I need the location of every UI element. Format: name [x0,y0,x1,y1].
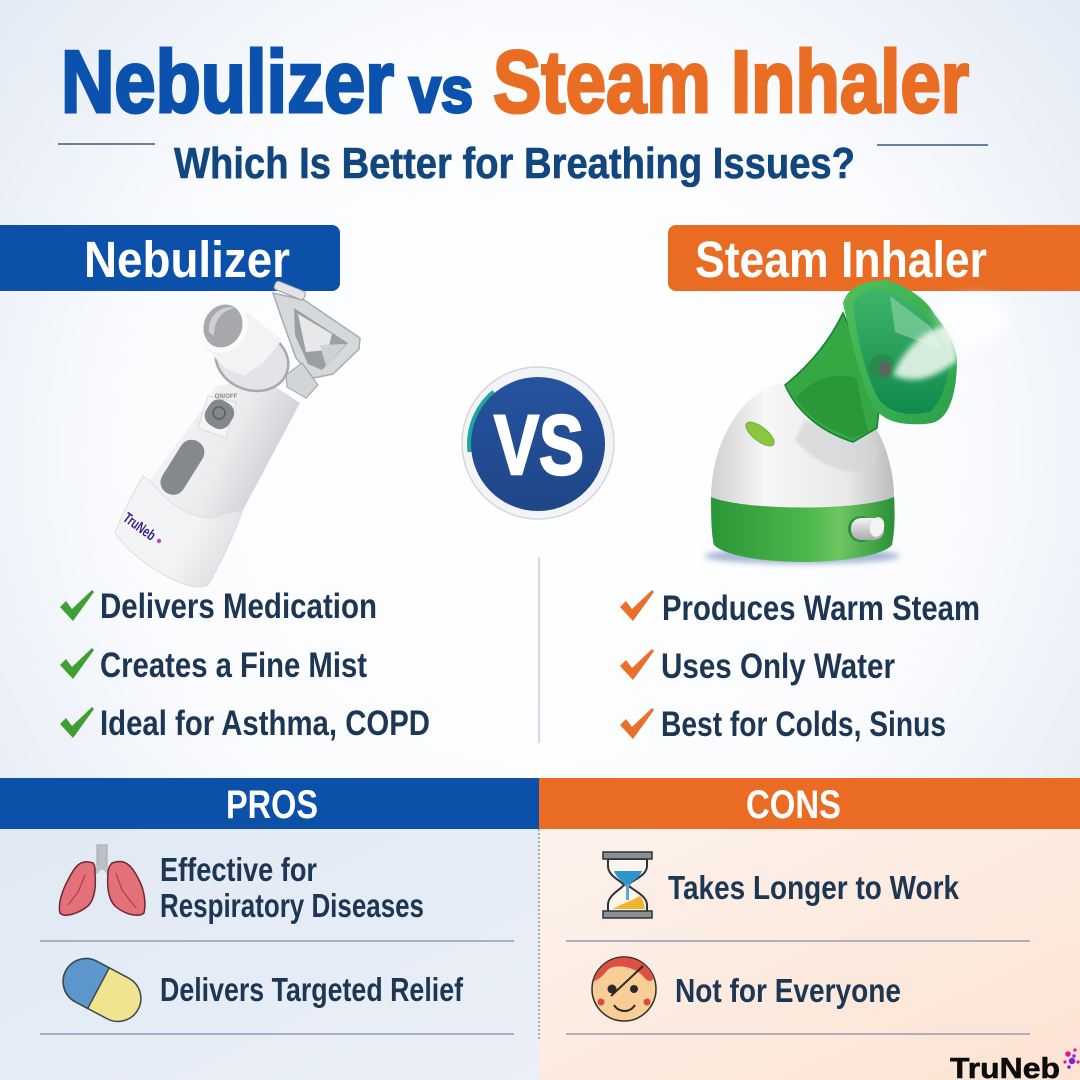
check item: Ideal for Asthma, COPD: Ideal for Asthma, COPD [100,704,430,743]
VS badge: VS [494,398,584,492]
banner: Nebulizer: Nebulizer [84,231,290,288]
clear ring [207,319,297,401]
title: vs [409,54,473,126]
buttons [198,396,236,438]
pros header [0,778,539,829]
text: effective for respiratory diseases: Respiratory Diseases [160,887,424,924]
banner: Nebulizer [0,225,340,291]
base shadow [704,548,900,564]
mouthpiece [203,305,282,376]
panel: cons [539,778,1080,1080]
title: Nebulizer [61,32,394,131]
lock clip [286,363,318,398]
check item: Best for Colds, Sinus: Best for Colds, Sinus [661,705,946,744]
text: not for everyone: Not for Everyone [675,972,901,1009]
text: effective for respiratory diseases [160,851,424,924]
list: nebulizer features [60,587,430,743]
check item: Uses Only Water: Uses Only Water [661,647,895,686]
TruNeb mark: TruNeb [120,509,159,544]
white dome [711,382,894,508]
cons header: CONS [746,783,841,827]
icon: lungs [59,845,145,915]
logo: TruNeb [950,1048,1080,1080]
funnel rim [843,280,957,424]
cons header [539,778,1080,829]
medicine cup [273,280,360,378]
list: steam inhaler features [620,589,980,744]
divider [538,557,540,743]
icon: face [592,957,656,1021]
title: Steam Inhaler [493,32,969,131]
nozzle [869,354,895,380]
text: delivers targeted relief: Delivers Targeted Relief [160,971,464,1008]
check item: Produces Warm Steam: Produces Warm Steam [662,589,980,628]
icon: capsule [55,950,149,1030]
title [61,32,969,131]
pros header: PROS [226,783,318,827]
handle body [150,378,300,522]
power slot [742,418,778,450]
dotted column divider [538,829,540,1041]
subtitle: Which Is Better for Breathing Issues? [174,139,855,188]
VS badge [462,367,614,519]
icon: steam inhaler device [704,280,1010,564]
icon: nebulizer device [115,280,360,587]
text: effective for respiratory diseases: Effective for [160,851,317,888]
funnel interior [853,290,950,414]
check item: Creates a Fine Mist: Creates a Fine Mist [100,646,367,685]
check item: Delivers Medication: Delivers Medication [100,587,377,626]
knob [848,516,874,542]
cradle [115,476,243,587]
green base [711,496,895,562]
banner: Steam Inhaler: Steam Inhaler [695,231,987,288]
neck [785,313,880,442]
icon: nebulizer device: ON/OFF [215,394,238,400]
icon: hourglass [603,852,652,918]
text: takes longer to work: Takes Longer to Work [668,869,960,906]
steam [893,325,958,380]
panel: pros [0,778,539,1080]
